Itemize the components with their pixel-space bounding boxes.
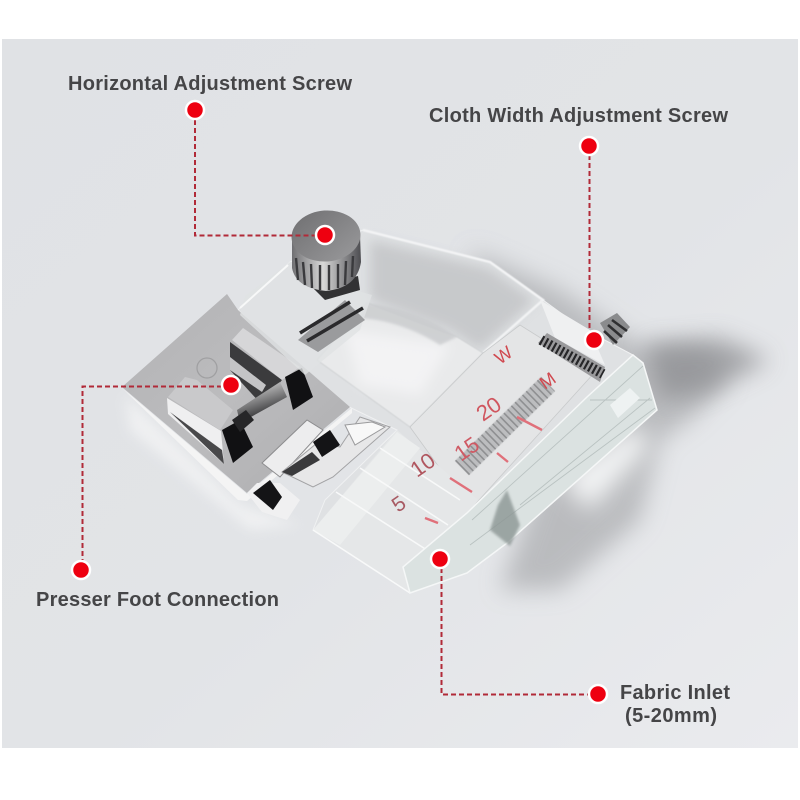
scale markings: 10 [406, 448, 440, 482]
label: Horizontal Adjustment Screw [68, 73, 352, 244]
front clamp block [168, 377, 233, 430]
fabric inlet front lip [403, 355, 657, 593]
clear plastic guide body [238, 230, 657, 593]
upper frame shaded area [370, 240, 535, 350]
label: Horizontal Adjustment Screw: Horizontal Adjustment Screw [68, 73, 352, 95]
window [317, 303, 483, 427]
label: Fabric Inlet [431, 550, 730, 727]
scale markings [388, 342, 560, 523]
cast shadows [125, 250, 770, 590]
connector bar [237, 382, 287, 423]
scale markings: 15 [450, 432, 484, 466]
label: Fabric Inlet: (5-20mm) [625, 705, 717, 727]
label: Presser Foot Connection [36, 376, 279, 611]
scale markings: 5 [388, 492, 410, 517]
scale markings: 20 [472, 392, 506, 426]
left ruled inlet section [313, 430, 478, 593]
scale markings: M [536, 368, 560, 393]
horizontal adjustment knob assembly [240, 208, 372, 375]
label: Fabric Inlet: Fabric Inlet [620, 682, 730, 704]
metal presser foot plate [122, 294, 390, 520]
slot and toe [262, 420, 323, 477]
label: Cloth Width Adjustment Screw: Cloth Width Adjustment Screw [429, 105, 728, 127]
label: Presser Foot Connection: Presser Foot Connection [36, 589, 279, 611]
scale markings: W [491, 342, 516, 368]
label: Cloth Width Adjustment Screw [429, 105, 728, 349]
threaded screw [462, 313, 630, 468]
scale strip [410, 325, 595, 510]
rear clamp block [230, 342, 282, 405]
